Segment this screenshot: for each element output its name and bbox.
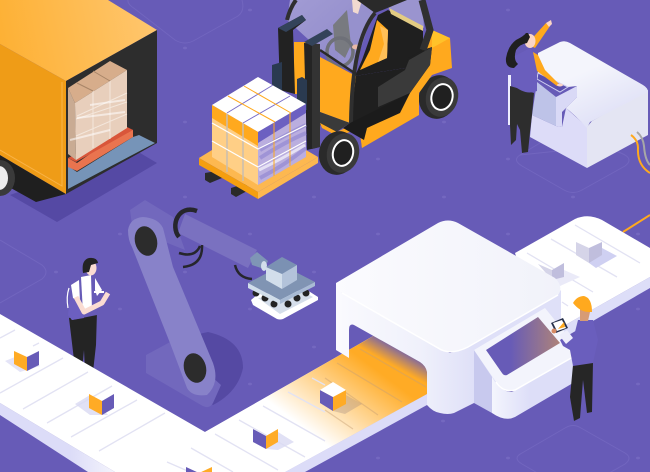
top right machine [508,41,650,173]
truck [0,0,157,222]
arm joints [131,224,161,258]
console front [492,357,573,419]
man backpack strap [67,288,69,308]
stack left face [212,105,258,185]
man with clipboard [67,258,108,372]
forklift orange body [358,30,452,148]
upper arm [175,210,257,279]
woman lower arm [533,52,560,86]
forklift side panels [351,47,432,123]
cubes on belt [5,351,362,472]
truck side [0,44,66,194]
arm base shadow disc [170,332,243,405]
machine front with tunnel [336,283,474,414]
worker sleeve cuff [559,330,573,344]
machine top [336,220,560,352]
woman head [524,34,536,48]
glass windshield [287,0,375,72]
cable loops [175,210,197,237]
woman legs [510,86,534,153]
truck floor [68,135,155,189]
robot arm [128,200,318,407]
man trousers [69,311,97,372]
belt top [515,216,650,328]
machine right side [468,290,561,404]
orange front panel [320,57,356,123]
belt side [560,277,650,340]
cab interior [355,10,423,76]
cube 4 [186,467,212,472]
cube 3 [253,429,294,450]
worker trousers [570,362,593,421]
woman hand [557,84,563,86]
plate [248,265,315,300]
arm link [128,217,215,395]
cube 5 [320,382,362,414]
upper right conveyor [515,215,650,340]
forklift rear wheel [414,71,463,123]
wrapped cargo boxes [68,61,127,160]
main machine [336,220,575,419]
woman raised hand [546,20,552,27]
worker torso [560,320,598,366]
black lower body [343,93,410,140]
woman hair [506,33,530,68]
machine left strip behind woman [508,75,511,125]
control notch [532,73,577,127]
belt side lower [285,394,427,472]
forklift roof [357,0,407,13]
grey cubes [538,242,617,286]
conveyor belt [0,314,427,472]
forklift front wheel [314,127,364,179]
stack straps and bands [212,85,306,181]
rear window [388,0,424,28]
machine top [538,41,648,128]
worker neck and face [580,308,590,321]
suction cups [252,290,310,308]
forklift seat [360,20,388,70]
glass behind cab [345,0,425,60]
fork tines [205,170,222,183]
worker helmet [573,296,592,312]
gripper [248,252,318,320]
console top [474,308,575,391]
gripper cube [266,257,297,274]
orange wire [623,215,650,232]
cables [631,135,650,173]
man vest [68,279,102,320]
man arms [76,293,108,312]
forklift front mast [297,29,333,150]
arm base [146,341,221,407]
forklift rear mast [272,15,306,94]
pallet with wrapped stack [199,77,318,199]
cube 1 [5,351,40,372]
woman torso [511,48,537,92]
cube 2 [75,394,114,415]
truck rear opening [66,30,157,194]
shoulder gear [130,200,185,250]
pallet [199,150,318,192]
belt top [0,314,427,472]
forklift cab posts [287,0,375,123]
red pallet [68,127,133,171]
forklift [272,0,463,179]
truck chassis [0,155,66,202]
control console [474,308,575,419]
console side [474,350,492,413]
driver [327,0,372,70]
worker with tablet [551,296,598,421]
stack right face [258,104,306,185]
console screen [486,317,560,375]
woman raised arm [527,23,550,48]
truck wheel [0,160,15,196]
tablet [551,318,568,334]
stack top [212,77,306,132]
machine right face [587,90,648,168]
belt lines [0,330,325,472]
truck shadow [10,150,157,222]
man shirt [81,275,92,313]
man head [86,260,96,276]
woman at machine [506,20,563,153]
machine left face [530,108,587,168]
belt side left [0,403,115,472]
truck top [0,0,157,81]
suction plate [251,290,318,320]
